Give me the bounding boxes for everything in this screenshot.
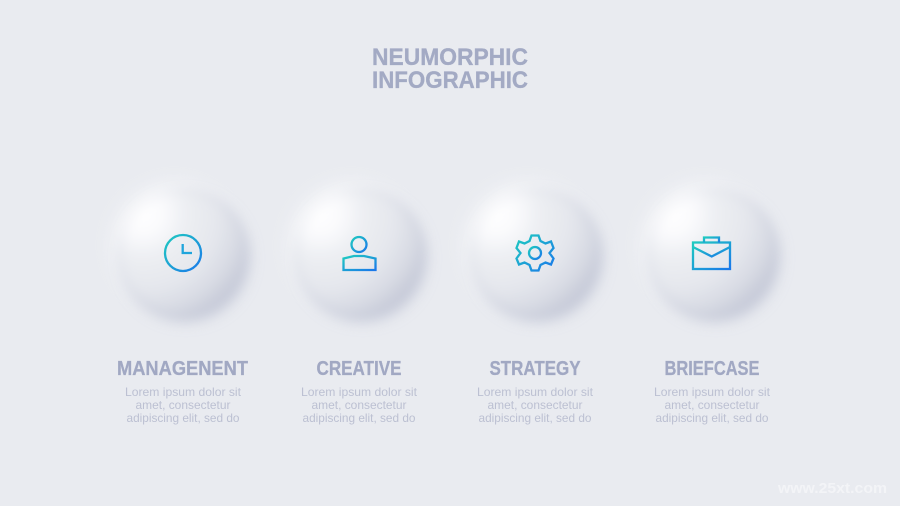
text: briefcase description: amet, consectetur <box>664 398 760 412</box>
text: strategy description: Lorem ipsum dolor sit <box>477 385 594 399</box>
panel: briefcase <box>644 185 778 425</box>
sphere: strategy <box>467 185 601 320</box>
text: creative description: Lorem ipsum dolor sit <box>301 385 418 399</box>
title <box>372 44 528 94</box>
text: creative description: adipiscing elit, sed do <box>302 411 416 425</box>
heading: creative: CREATIVE <box>316 358 402 380</box>
text: management description <box>125 385 242 425</box>
text: management description: adipiscing elit, sed do <box>126 411 240 425</box>
heading: strategy: STRATEGY <box>490 358 581 380</box>
watermark: www.25xt.com <box>777 480 887 497</box>
panel: creative <box>291 185 425 425</box>
text: strategy description <box>477 385 594 425</box>
sphere: creative <box>291 185 425 320</box>
icon: clock <box>165 235 201 271</box>
panel: management <box>114 185 248 425</box>
title: NEUMORPHIC <box>372 44 528 71</box>
heading: briefcase: BRIEFCASE <box>664 358 760 380</box>
sphere: management <box>114 185 248 320</box>
icon: person <box>344 237 376 270</box>
heading: management: MANAGENENT <box>117 358 248 380</box>
text: management description: Lorem ipsum dolor sit <box>125 385 242 399</box>
text: creative description: amet, consectetur <box>312 398 406 412</box>
text: strategy description: adipiscing elit, sed do <box>478 411 592 425</box>
text: strategy description: amet, consectetur <box>488 398 582 412</box>
title: INFOGRAPHIC <box>372 67 528 94</box>
text: creative description <box>301 385 418 425</box>
text: briefcase description: adipiscing elit, sed do <box>656 411 769 425</box>
text: briefcase description: Lorem ipsum dolor sit <box>654 385 771 399</box>
text: management description: amet, consectetur <box>136 398 230 412</box>
icon: briefcase <box>693 238 730 269</box>
icon: gear <box>516 236 554 270</box>
sphere: briefcase <box>644 185 778 320</box>
panel: strategy <box>467 185 601 425</box>
text: briefcase description <box>654 385 771 425</box>
